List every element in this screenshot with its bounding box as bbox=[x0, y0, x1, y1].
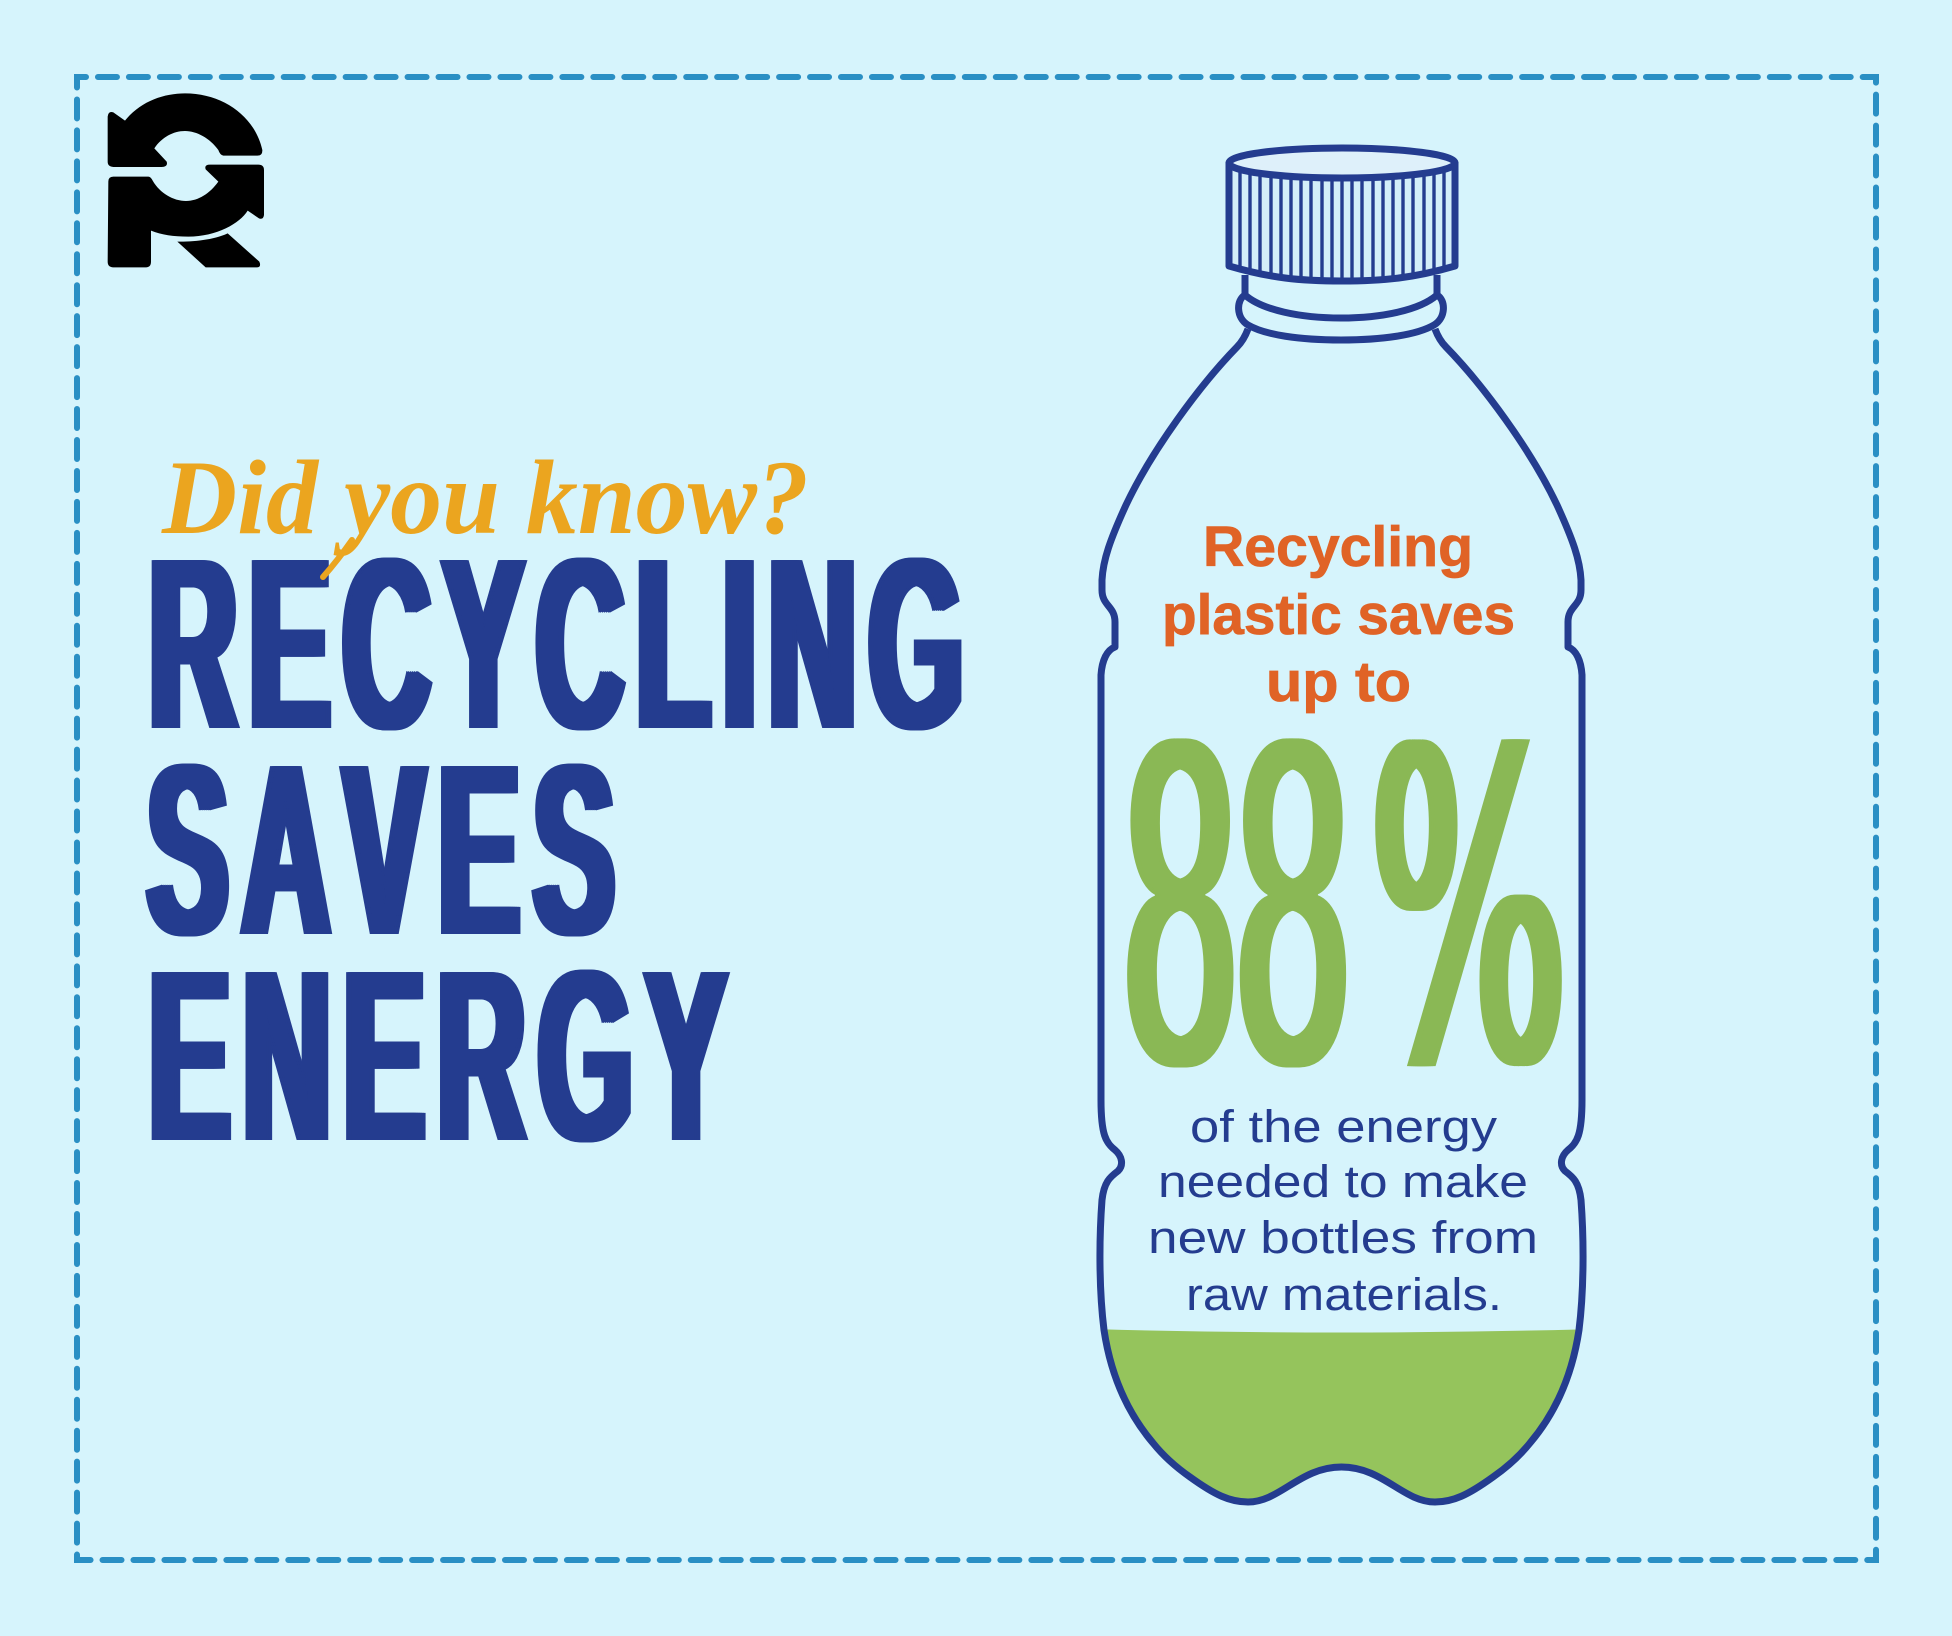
bottle outline bbox=[1100, 329, 1583, 1502]
script title: did you know: Did you know? bbox=[161, 439, 809, 556]
body text: of the energy needed: needed to make bbox=[1158, 1156, 1528, 1207]
callout: recycling plastic saves up to: up to bbox=[1266, 650, 1411, 714]
heading: recycling saves energy bbox=[145, 507, 975, 1192]
liquid fill bbox=[1108, 1329, 1576, 1498]
big number: 88% bbox=[1124, 642, 1567, 1162]
callout: recycling plastic saves up to: plastic saves bbox=[1162, 583, 1515, 647]
heading: recycling saves energy: ENERGY bbox=[149, 919, 739, 1192]
heading: recycling saves energy: SAVES bbox=[147, 713, 628, 986]
callout: recycling plastic saves up to: Recycling bbox=[1203, 515, 1473, 579]
heading: recycling saves energy: RECYCLING bbox=[149, 507, 975, 780]
bottle illustration bbox=[1090, 148, 1595, 1520]
big number: 88%: 88 bbox=[1124, 642, 1349, 1162]
body text: of the energy needed bbox=[1148, 1101, 1538, 1320]
bottle cap bbox=[1229, 148, 1455, 281]
callout: recycling plastic saves up to bbox=[1162, 515, 1515, 714]
bottle neck and ring bbox=[1239, 275, 1443, 340]
big number: 88%: % bbox=[1370, 659, 1567, 1162]
body text: of the energy needed: of the energy bbox=[1190, 1101, 1498, 1152]
body text: of the energy needed: new bottles from bbox=[1148, 1212, 1538, 1263]
icon: recycling R logo bbox=[108, 93, 264, 267]
body text: of the energy needed: raw materials. bbox=[1186, 1269, 1502, 1320]
